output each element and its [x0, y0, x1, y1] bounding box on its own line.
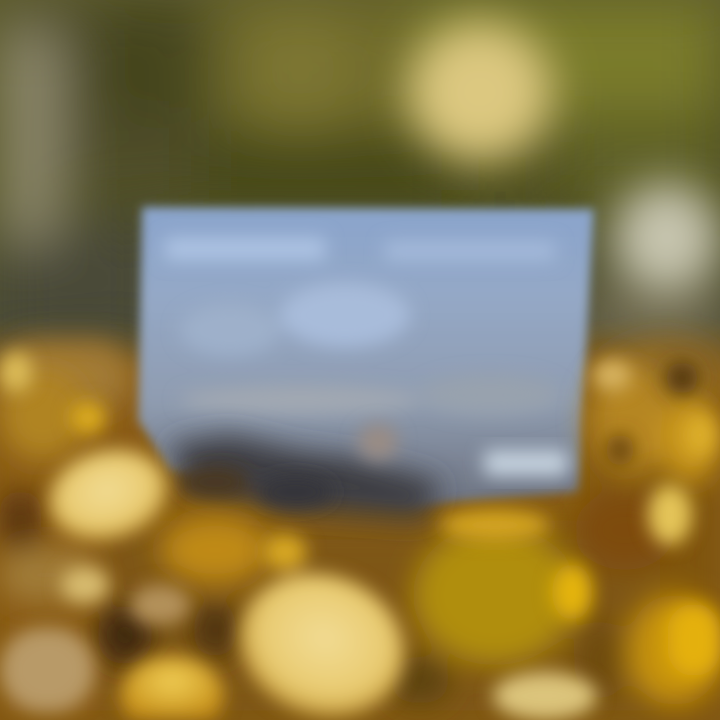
bokeh light: pale yellow: [408, 22, 552, 162]
card details: [165, 238, 568, 520]
gold coins: [0, 352, 720, 720]
card logo patch: [484, 450, 568, 476]
card landscape: [170, 435, 440, 520]
bokeh light: pale grey: [613, 182, 720, 294]
coin highlights: [0, 352, 720, 720]
coin pile backdrop: [0, 339, 720, 720]
credit card: [138, 207, 594, 505]
